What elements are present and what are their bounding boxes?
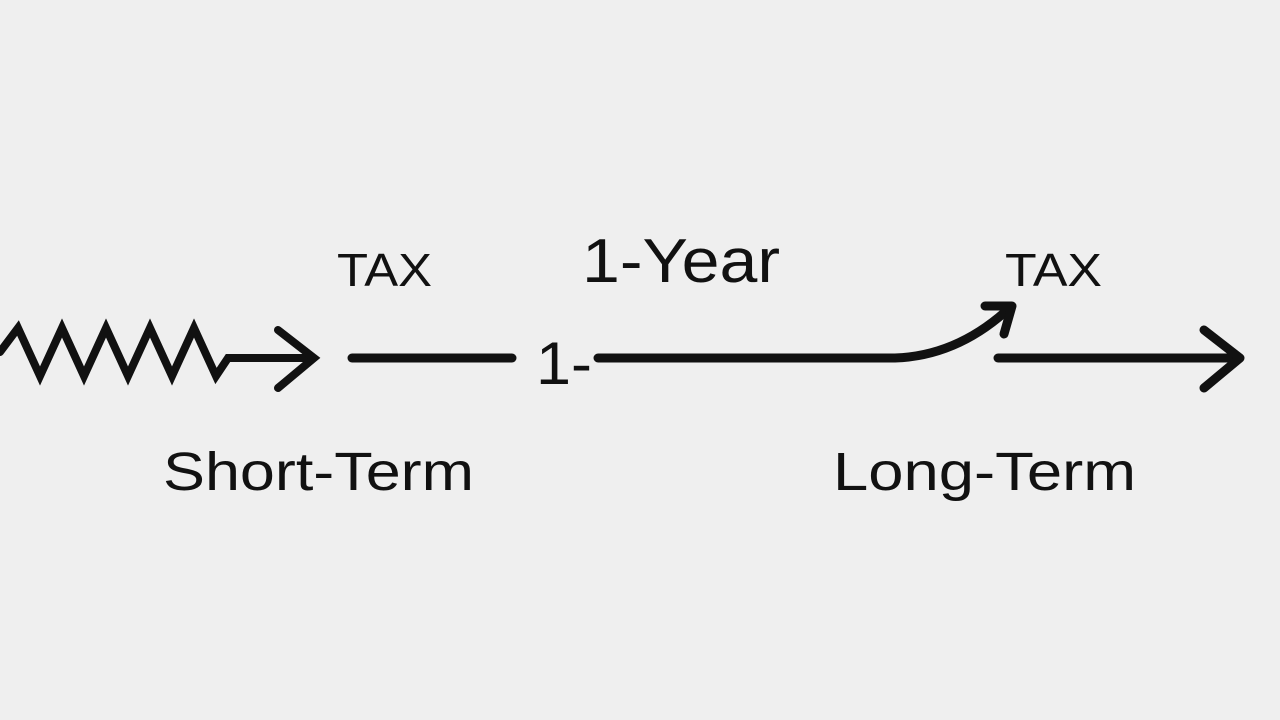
icon: zigzag volatile line with arrow — [0, 328, 314, 388]
arrow: long-term line — [998, 330, 1240, 388]
label: Short-Term: Short-Term — [163, 442, 474, 502]
arrow: curved line rising to long-term TAX — [598, 306, 1012, 358]
label: Long-Term: Long-Term — [833, 442, 1136, 502]
label: 1- marker: 1- — [536, 330, 592, 397]
line segment before 1-year — [352, 354, 512, 362]
label: 1-Year: 1-Year — [582, 227, 780, 296]
label: TAX right: TAX — [1005, 244, 1102, 296]
label: TAX left: TAX — [337, 244, 432, 296]
